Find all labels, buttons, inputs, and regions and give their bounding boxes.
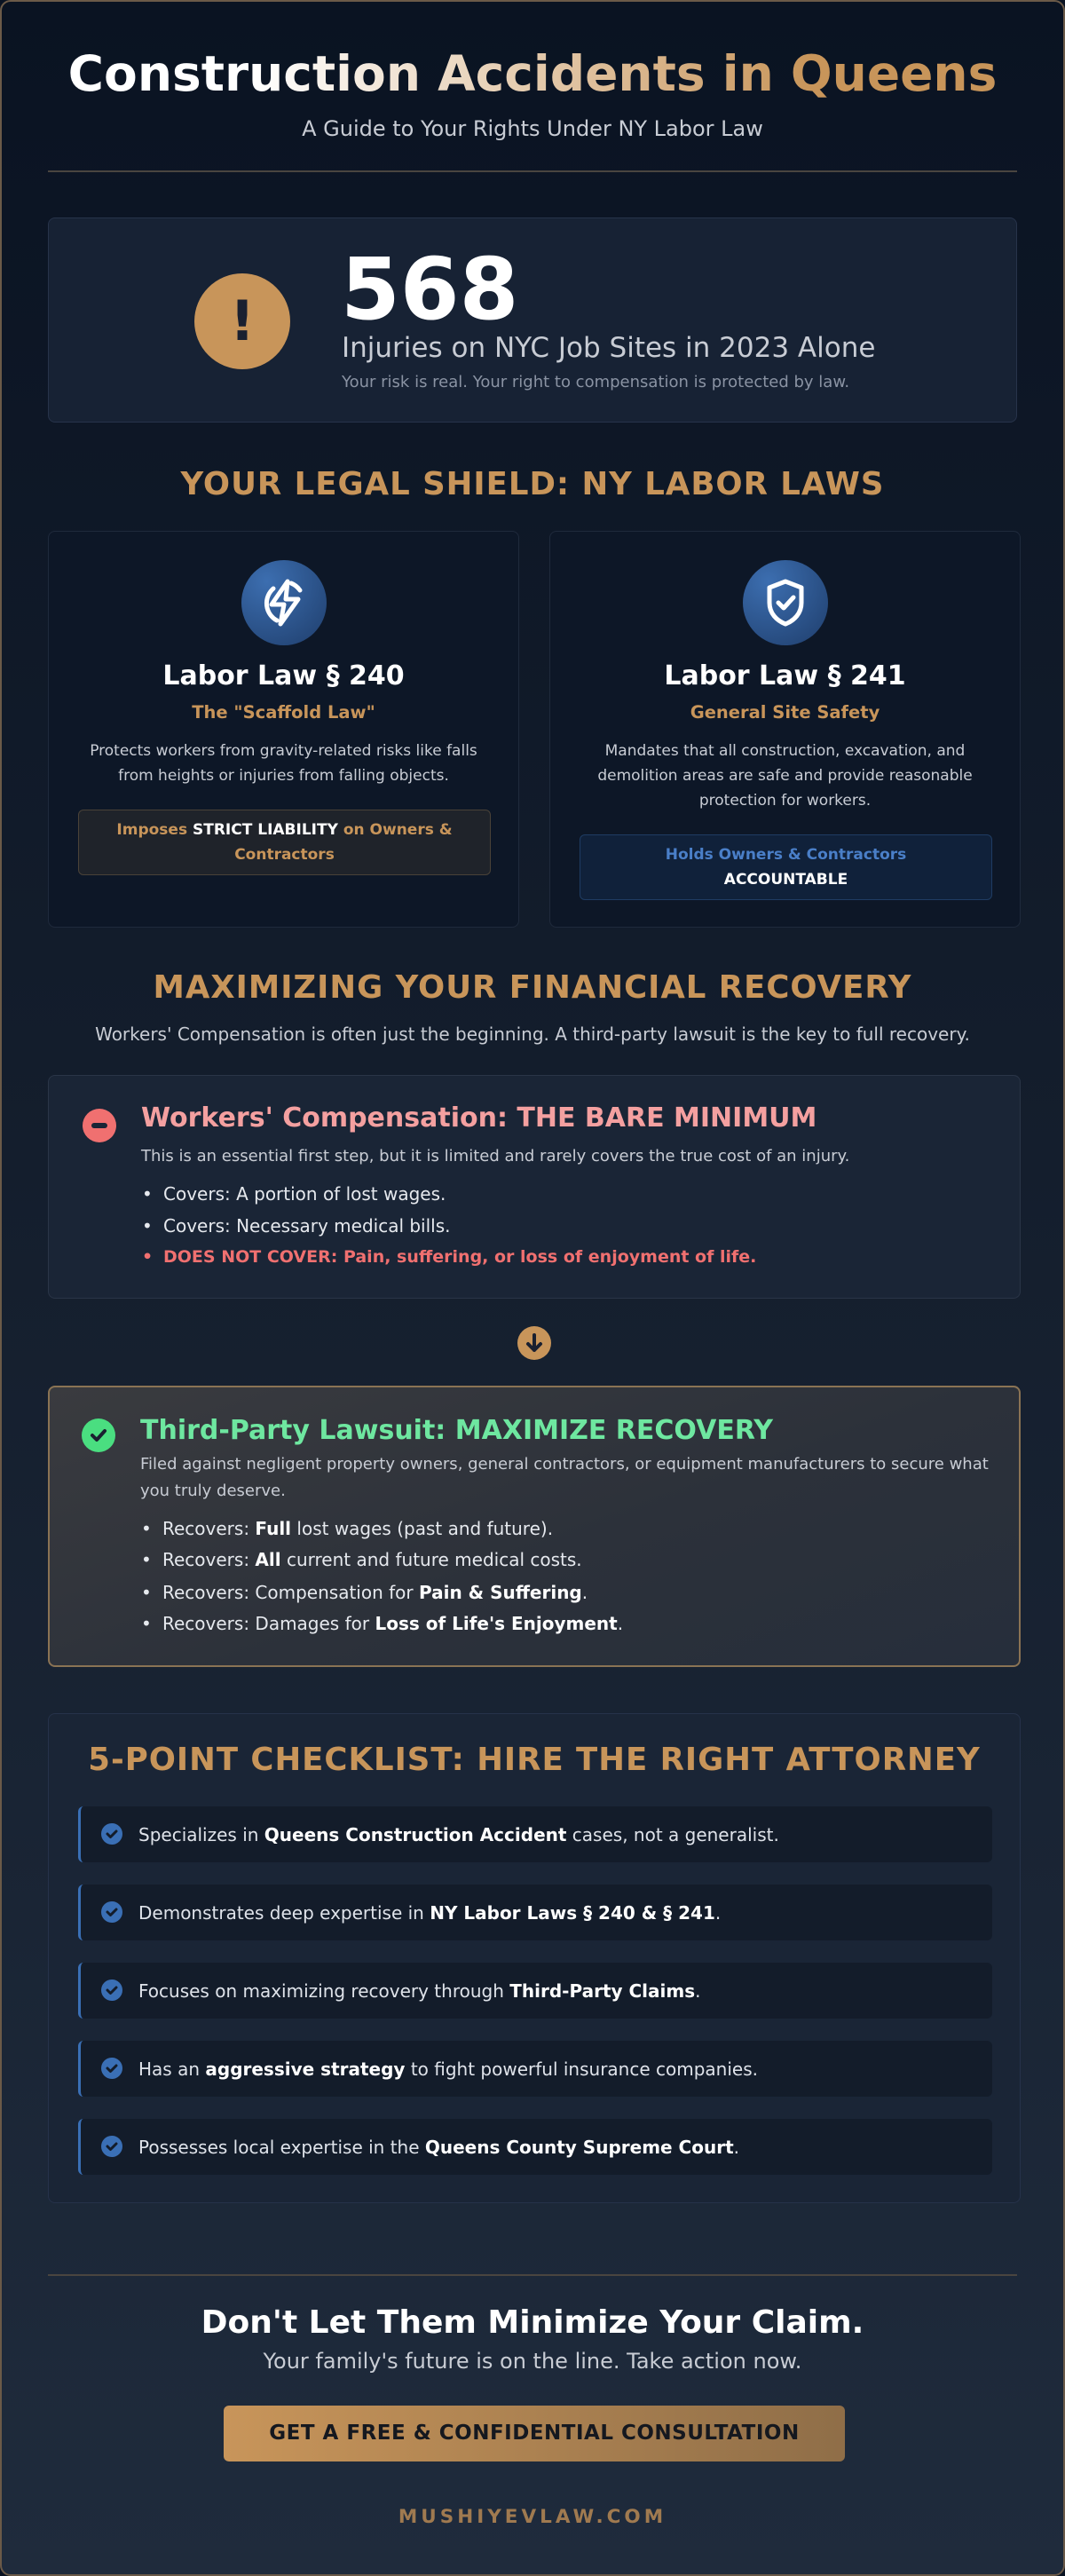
card description: Mandates that all construction, excavation, and demolition areas are safe and provide reasonable protection for workers. xyxy=(597,742,973,810)
stat number: 568 xyxy=(341,240,518,339)
item 2: Demonstrates deep expertise in NY Labor Laws § 240 & § 241. xyxy=(138,1901,721,1923)
subtitle: A Guide to Your Rights Under NY Labor Law xyxy=(302,116,763,141)
icon: bolt xyxy=(241,560,327,645)
item 4: Has an aggressive strategy to fight powerful insurance companies. xyxy=(138,2058,758,2079)
item 3 xyxy=(78,1963,992,2019)
panel: workers comp: Covers: Necessary medical bills. xyxy=(163,1215,451,1237)
description: This is an essential first step, but it is limited and rarely covers the true cost of an injury. xyxy=(141,1147,849,1166)
callout: accountable xyxy=(580,834,992,900)
bullets: Covers: A portion of lost wages. xyxy=(163,1183,446,1205)
bullets: Recovers: Full lost wages (past and future). xyxy=(162,1518,553,1539)
footer url: MUSHIYEVLAW.COM xyxy=(398,2506,667,2528)
panel: stat xyxy=(48,217,1017,423)
callout: accountable: ACCOUNTABLE xyxy=(724,871,848,889)
button xyxy=(224,2406,845,2461)
CTA subtext: Your family's future is on the line. Take action now. xyxy=(264,2349,801,2374)
callout: strict liability: Imposes STRICT LIABILITY on Owners & Contractors xyxy=(116,821,453,864)
button: GET A FREE & CONFIDENTIAL CONSULTATION xyxy=(269,2422,800,2445)
card subtitle: The "Scaffold Law" xyxy=(192,702,375,723)
callout: strict liability xyxy=(78,810,491,875)
heading: legal shield: YOUR LEGAL SHIELD: NY LABOR LAWS xyxy=(180,466,884,502)
panel: law 241 xyxy=(549,531,1021,928)
panel: third party xyxy=(48,1386,1021,1667)
panel: workers comp: DOES NOT COVER: Pain, suffering, or loss of enjoyment of life. xyxy=(163,1247,756,1267)
description: Filed against negligent property owners, general contractors, or equipment manufacturers to secure what you truly deserve. xyxy=(140,1455,989,1500)
heading: financial recovery: MAXIMIZING YOUR FINANCIAL RECOVERY xyxy=(153,969,911,1006)
icon: warning: ! xyxy=(230,288,255,353)
icon: warning xyxy=(194,273,290,369)
icon: shield xyxy=(743,560,828,645)
panel: checklist xyxy=(48,1713,1021,2203)
item 5: Possesses local expertise in the Queens County Supreme Court. xyxy=(138,2136,739,2157)
icon: check xyxy=(82,1418,115,1452)
arrow: down xyxy=(517,1326,551,1360)
icon: minus xyxy=(83,1109,116,1142)
item 2 xyxy=(78,1885,992,1940)
callout: accountable: Holds Owners & Contractors xyxy=(666,846,906,864)
panel: third party: Recovers: Compensation for Pain & Suffering. xyxy=(162,1582,588,1603)
card description: Protects workers from gravity-related risks like falls from heights or injuries from falling objects. xyxy=(90,742,477,785)
panel: workers comp xyxy=(48,1075,1021,1299)
heading: Third-Party Lawsuit: MAXIMIZE RECOVERY xyxy=(140,1415,773,1446)
panel: third party: Recovers: All current and future medical costs. xyxy=(162,1549,582,1570)
card subtitle: General Site Safety xyxy=(690,702,880,723)
heading: Workers' Compensation: THE BARE MINIMUM xyxy=(141,1102,816,1134)
card title: Labor Law § 240 xyxy=(162,660,405,691)
stat label: Injuries on NYC Job Sites in 2023 Alone xyxy=(342,332,875,364)
item 3: Focuses on maximizing recovery through Third-Party Claims. xyxy=(138,1979,701,2001)
item 1 xyxy=(78,1806,992,1862)
stat note: Your risk is real. Your right to compensation is protected by law. xyxy=(342,373,849,391)
item 4 xyxy=(78,2041,992,2097)
subheading: Workers' Compensation is often just the beginning. A third-party lawsuit is the key to full recovery. xyxy=(95,1023,970,1045)
CTA heading: Don't Let Them Minimize Your Claim. xyxy=(201,2304,864,2341)
item 1: Specializes in Queens Construction Accident cases, not a generalist. xyxy=(138,1823,779,1845)
item 5 xyxy=(78,2119,992,2175)
checklist heading: 5-POINT CHECKLIST: HIRE THE RIGHT ATTORNEY xyxy=(88,1742,981,1778)
panel: law 240 xyxy=(48,531,519,928)
panel: third party: Recovers: Damages for Loss of Life's Enjoyment. xyxy=(162,1613,623,1634)
title: Construction Accidents in Queens xyxy=(68,45,997,102)
card title: Labor Law § 241 xyxy=(664,660,906,691)
